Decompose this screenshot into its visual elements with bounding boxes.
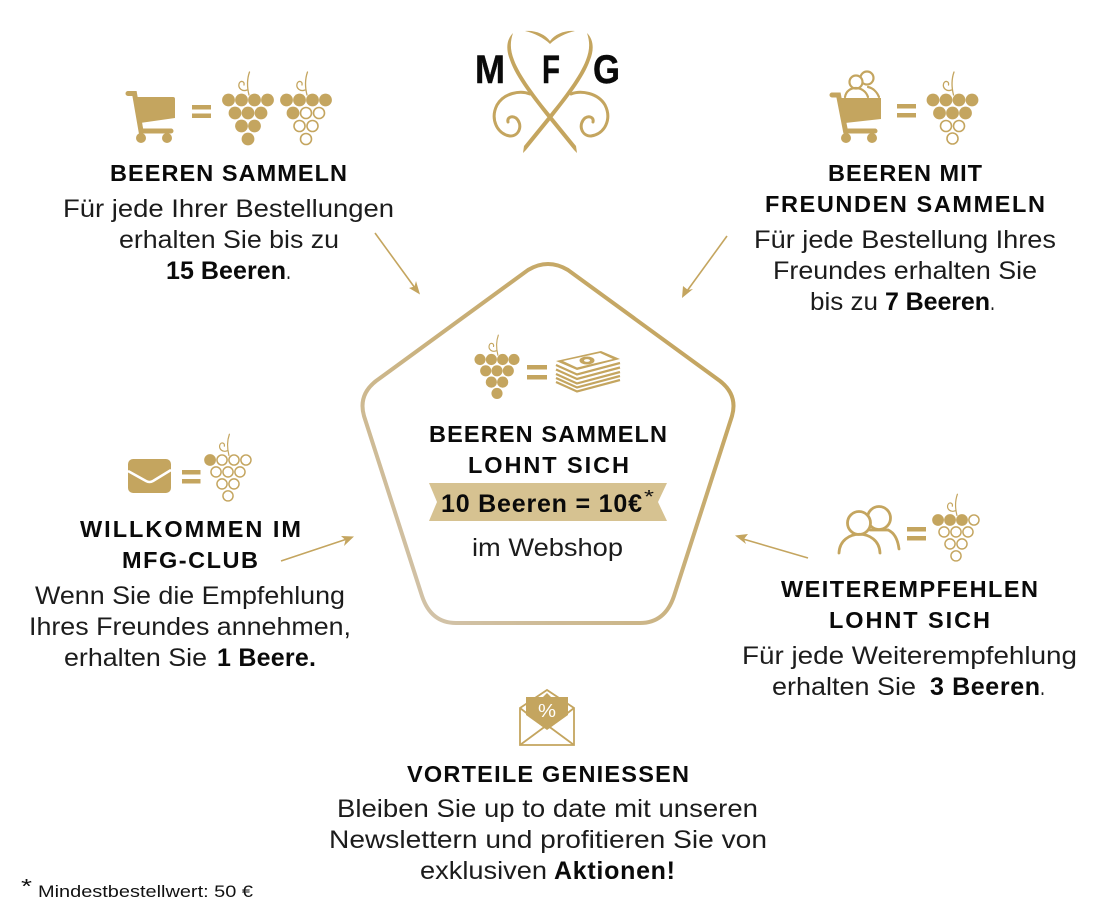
text block (29, 582, 351, 672)
icon: money stack (556, 351, 620, 392)
text block: 15 Beeren (166, 257, 286, 285)
heading: BEEREN SAMMELN (429, 421, 667, 447)
icon: grape seven filled (927, 72, 978, 144)
footnote: Mindestbestellwert: 50 € (38, 882, 254, 901)
panel: Beeren mit Freunden sammeln (754, 72, 1056, 316)
text block: . (286, 257, 291, 285)
footnote (21, 876, 254, 901)
icon: grape (474, 335, 520, 399)
icon: open envelope with percent: % (538, 701, 556, 721)
text block: Für jede Weiterempfehlung (742, 642, 1077, 670)
text block: 7 Beeren (885, 288, 990, 316)
icon: shopping cart (128, 94, 175, 143)
text block: erhalten Sie (772, 673, 916, 701)
heading: WEITEREMPFEHLEN (781, 576, 1038, 602)
heading: BEEREN SAMMELN (110, 160, 347, 186)
text block: Bleiben Sie up to date mit unseren (337, 795, 758, 823)
text block: 3 Beeren (930, 673, 1040, 701)
text block: Für jede Bestellung Ihres (754, 226, 1056, 254)
ribbon (429, 483, 667, 521)
pentagon outline (362, 264, 734, 623)
heading: VORTEILE GENIESSEN (407, 761, 689, 787)
text block (63, 195, 394, 285)
icon: envelope (128, 459, 171, 493)
text block: Aktionen! (554, 857, 675, 885)
logo: MFG heart (475, 31, 620, 153)
heading: MFG-CLUB (122, 547, 258, 573)
icon: cart with friends (832, 72, 881, 143)
text block (329, 795, 767, 885)
arrow: top left to centre (375, 233, 420, 294)
text block: erhalten Sie (64, 644, 207, 672)
ribbon: 10 Beeren = 10€ (441, 490, 642, 518)
icon: grape one filled (204, 434, 251, 501)
heading: BEEREN MIT (828, 160, 983, 186)
icon: partly filled grape (280, 72, 332, 144)
heading (781, 576, 1038, 633)
heading (429, 421, 667, 478)
icon: open envelope with percent (520, 690, 574, 745)
text block: Newslettern und profitieren Sie von (329, 826, 767, 854)
text block (754, 226, 1056, 316)
text block: Wenn Sie die Empfehlung (35, 582, 345, 610)
heading: LOHNT SICH (829, 607, 990, 633)
arrow: right to centre (735, 534, 808, 558)
panel: Weiterempfehlen lohnt sich (742, 494, 1077, 701)
heading (765, 160, 1045, 217)
icon: two friends (839, 506, 899, 553)
text: im Webshop: im Webshop (472, 534, 623, 562)
icon: equals (192, 105, 211, 118)
heading: LOHNT SICH (468, 452, 629, 478)
panel: central pentagon (362, 264, 734, 623)
text block (742, 642, 1077, 701)
icon: equals (182, 470, 200, 484)
icon: grape three filled (932, 494, 979, 561)
text block: bis zu (810, 288, 878, 316)
heading: FREUNDEN SAMMELN (765, 191, 1045, 217)
icon: equals (897, 104, 916, 118)
panel: Vorteile geniessen (329, 690, 767, 885)
panel: Beeren sammeln (63, 72, 394, 285)
text block: erhalten Sie bis zu (119, 226, 339, 254)
text block: 1 Beere. (217, 644, 316, 672)
text block: Für jede Ihrer Bestellungen (63, 195, 394, 223)
footnote: * (21, 876, 32, 898)
ribbon: * (644, 487, 654, 507)
panel: Willkommen im MFG-Club (29, 434, 351, 672)
icon: equals (907, 527, 926, 540)
heading: WILLKOMMEN IM (80, 516, 301, 542)
icon: full grape (222, 72, 274, 145)
logo: MFG heart: M (475, 48, 505, 92)
arrow: left to centre (281, 536, 354, 561)
text block: . (990, 288, 995, 316)
arrow: top right to centre (682, 236, 727, 298)
text block: Ihres Freundes annehmen, (29, 613, 351, 641)
logo: MFG heart: F (542, 48, 560, 92)
text block: Freundes erhalten Sie (773, 257, 1037, 285)
logo: MFG heart: G (593, 48, 620, 92)
text block: exklusiven (420, 857, 547, 885)
heading (80, 516, 301, 573)
icon: equals (527, 365, 547, 380)
text block: . (1040, 673, 1045, 701)
